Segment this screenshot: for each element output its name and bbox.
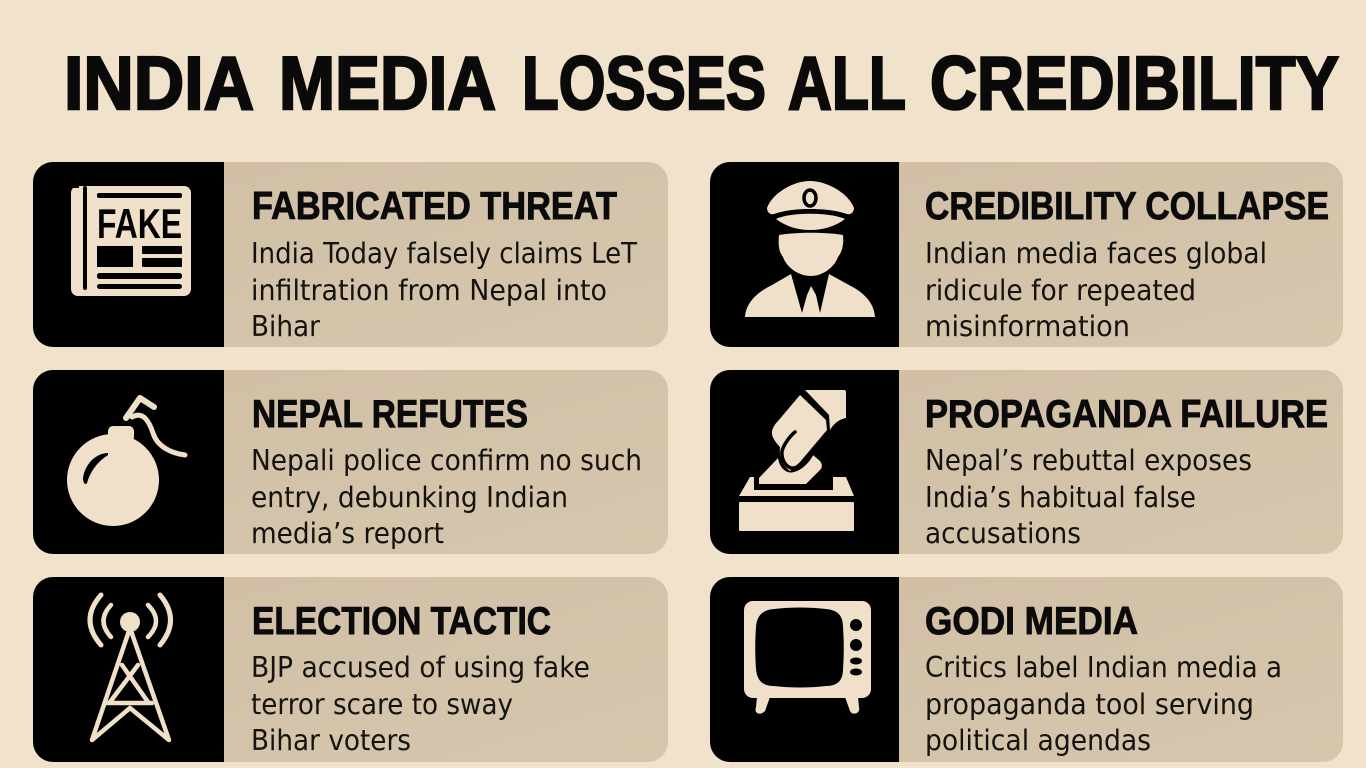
text block: ridicule for repeated: [925, 274, 1196, 307]
icon: bomb: [67, 398, 185, 526]
text block: India Today falsely claims LeT: [251, 237, 638, 270]
text block: India’s habitual false: [925, 481, 1196, 514]
title: INDIA: [64, 41, 254, 125]
text block: [925, 651, 1282, 757]
text block: Nepal’s rebuttal exposes: [925, 444, 1252, 477]
title: [64, 41, 1339, 125]
heading: NEPAL REFUTES: [252, 393, 528, 436]
icon: police officer: [745, 181, 875, 317]
icon: radio tower: [90, 595, 170, 740]
text block: misinformation: [925, 310, 1130, 343]
icon: fake newspaper: FAKE: [97, 200, 182, 247]
panel: propaganda failure: [710, 370, 1343, 554]
text block: accusations: [925, 517, 1081, 550]
text block: media’s report: [251, 517, 444, 550]
text block: Bihar: [251, 310, 320, 343]
text block: entry, debunking Indian: [251, 481, 568, 514]
panel: godi media: [710, 577, 1343, 762]
text block: [251, 651, 590, 757]
panel: election tactic: [33, 577, 668, 762]
panel: credibility collapse: [710, 162, 1343, 347]
text block: Critics label Indian media a: [925, 651, 1282, 684]
text block: BJP accused of using fake: [251, 651, 590, 684]
heading: ELECTION TACTIC: [252, 600, 551, 643]
panel: nepal refutes: [33, 370, 668, 554]
text block: Bihar voters: [251, 724, 411, 757]
title: LOSSES: [522, 41, 766, 125]
text block: infiltration from Nepal into: [251, 274, 607, 307]
text block: terror scare to sway: [251, 688, 513, 721]
panel: fabricated threat: [33, 162, 668, 347]
icon: television: [744, 601, 871, 714]
text block: propaganda tool serving: [925, 688, 1254, 721]
icon: fake newspaper: [71, 186, 191, 296]
title: MEDIA: [279, 41, 496, 125]
text block: [251, 237, 638, 343]
text block: Indian media faces global: [925, 237, 1267, 270]
text block: [251, 444, 642, 550]
text block: Nepali police confirm no such: [251, 444, 642, 477]
text block: political agendas: [925, 724, 1151, 757]
text block: [925, 237, 1267, 343]
heading: FABRICATED THREAT: [252, 185, 617, 228]
icon: hand casting ballot: [739, 390, 854, 531]
title: ALL: [788, 41, 906, 125]
heading: GODI MEDIA: [925, 600, 1138, 643]
text block: [925, 444, 1252, 550]
